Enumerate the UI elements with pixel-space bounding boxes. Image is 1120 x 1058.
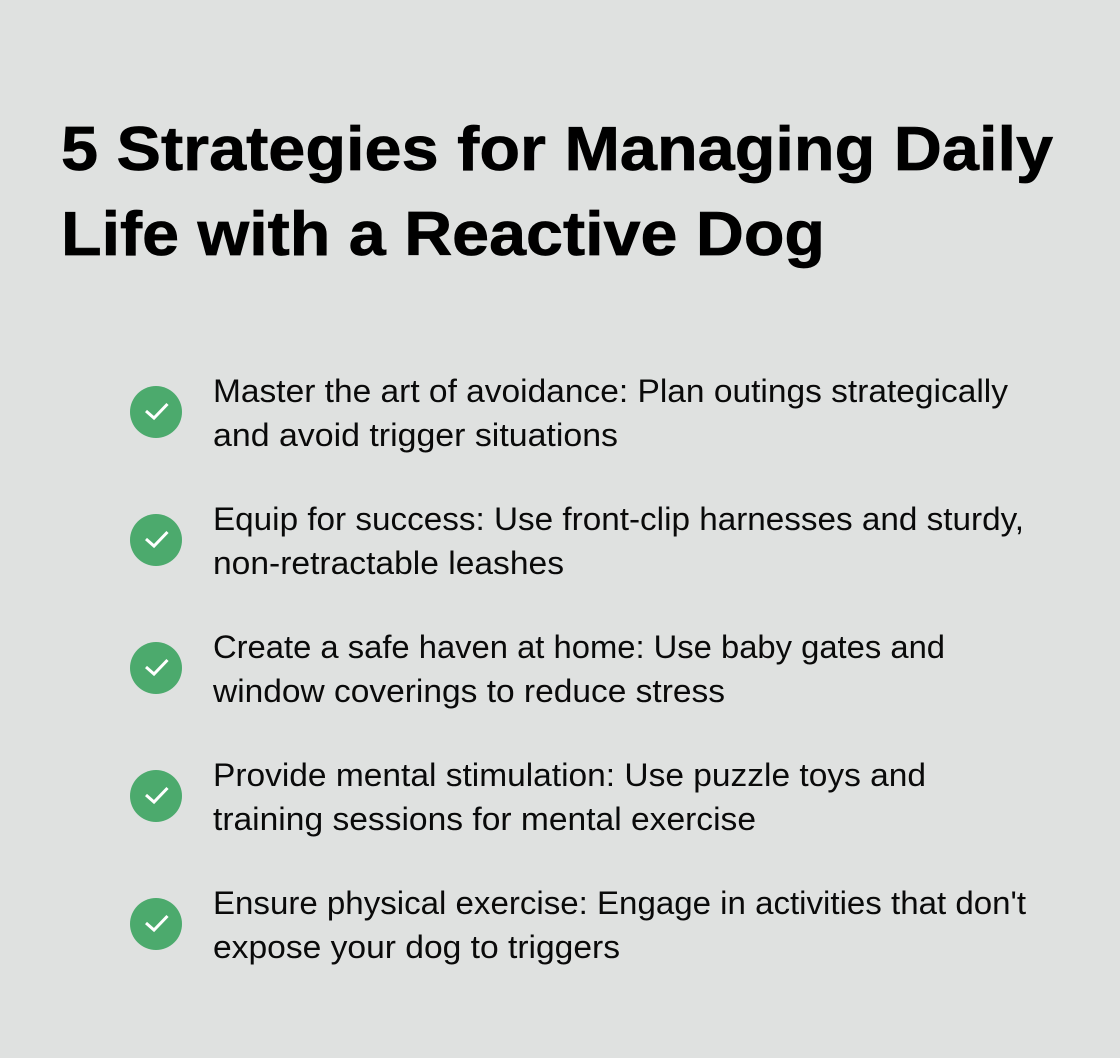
item 3: safe haven (130, 629, 945, 709)
item 5: physical exercise: Ensure physical exercise: Engage in activities that don't (213, 885, 1026, 921)
item 5: physical exercise: expose your dog to triggers (213, 929, 620, 965)
item 1: avoidance: Master the art of avoidance: Plan outings strategically (213, 373, 1008, 409)
title (61, 115, 1054, 269)
item 3: safe haven: window coverings to reduce stress (212, 673, 725, 709)
title: Life with a Reactive Dog (61, 200, 825, 269)
item 2: equipment (130, 501, 1024, 581)
item 2: equipment: non-retractable leashes (213, 545, 564, 581)
item 4: mental stimulation (130, 757, 926, 837)
item 5: physical exercise (130, 885, 1026, 965)
item 2: equipment: Equip for success: Use front-clip harnesses and sturdy, (213, 501, 1024, 537)
item 1: avoidance: and avoid trigger situations (213, 417, 618, 453)
item 1: avoidance (130, 373, 1008, 453)
strategy list (130, 373, 1026, 965)
title: 5 Strategies for Managing Daily (61, 115, 1054, 184)
item 3: safe haven: Create a safe haven at home: Use baby gates and (213, 629, 945, 665)
item 4: mental stimulation: training sessions for mental exercise (213, 801, 756, 837)
item 4: mental stimulation: Provide mental stimulation: Use puzzle toys and (213, 757, 926, 793)
